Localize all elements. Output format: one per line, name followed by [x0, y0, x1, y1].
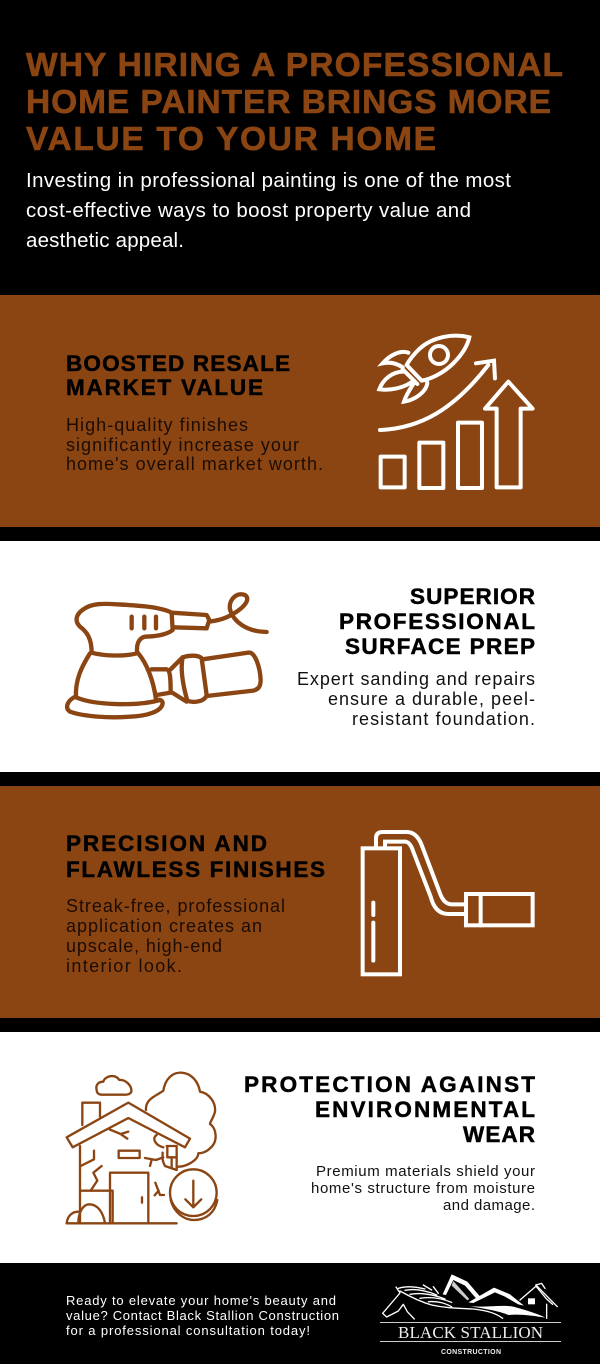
panel: precision and flawless finishes	[0, 786, 600, 1018]
logo rule: top	[380, 1322, 561, 1323]
intro text: aesthetic appeal.	[26, 229, 184, 252]
logo rule: bottom	[380, 1341, 561, 1342]
text: surface prep: ensure a durable, peel-	[328, 689, 535, 709]
text: surface prep: resistant foundation.	[352, 709, 535, 729]
heading: boosted resale: MARKET VALUE	[66, 375, 263, 400]
heading: protection: ENVIRONMENTAL	[315, 1097, 535, 1122]
title	[26, 47, 563, 158]
logo name: BLACK STALLION	[398, 1323, 543, 1342]
text: protection	[311, 1163, 535, 1214]
text: precision: upscale, high-end	[66, 936, 222, 956]
logo artwork: horse, mountains and house	[383, 1274, 557, 1319]
text: surface prep: Expert sanding and repairs	[297, 669, 535, 689]
call to action text: for a professional consultation today!	[66, 1323, 310, 1338]
call to action text: Ready to elevate your home's beauty and	[66, 1293, 336, 1308]
text: precision: interior look.	[66, 956, 182, 976]
logo house	[520, 1283, 557, 1318]
text: surface prep	[297, 669, 535, 729]
icon: damaged house	[67, 1073, 217, 1223]
intro text	[26, 169, 511, 252]
title: VALUE TO YOUR HOME	[26, 121, 436, 158]
logo mountains	[443, 1274, 524, 1306]
panel: protection against environmental wear	[0, 1032, 600, 1263]
heading: boosted resale: BOOSTED RESALE	[66, 351, 290, 376]
heading: surface prep: SUPERIOR	[410, 584, 535, 609]
icon: rocket and growth chart	[379, 336, 533, 488]
intro text: cost-effective ways to boost property value and	[26, 199, 471, 222]
header	[26, 47, 563, 252]
heading: precision: PRECISION AND	[66, 831, 267, 856]
heading: protection	[244, 1072, 535, 1147]
heading: surface prep: PROFESSIONAL	[339, 609, 535, 634]
logo window	[528, 1298, 535, 1304]
heading: protection: PROTECTION AGAINST	[244, 1072, 535, 1097]
call to action text	[66, 1293, 339, 1338]
heading: protection: WEAR	[463, 1122, 535, 1147]
logo swoosh	[466, 1306, 545, 1318]
text: boosted resale: High-quality finishes	[66, 415, 248, 435]
text: boosted resale	[66, 415, 323, 474]
text: precision: application creates an	[66, 916, 262, 936]
text: precision	[66, 896, 285, 976]
text: boosted resale: home's overall market worth.	[66, 454, 323, 474]
text: protection: Premium materials shield your	[316, 1163, 535, 1180]
heading: boosted resale	[66, 351, 290, 400]
heading: precision	[66, 831, 325, 882]
text: protection: and damage.	[443, 1197, 535, 1214]
heading: precision: FLAWLESS FINISHES	[66, 857, 325, 882]
heading: surface prep	[339, 584, 535, 659]
panel: boosted resale market value	[0, 295, 600, 527]
footer	[66, 1274, 561, 1356]
panel: superior professional surface prep	[0, 541, 600, 772]
logo: black stallion construction	[380, 1274, 561, 1356]
call to action text: value? Contact Black Stallion Construction	[66, 1308, 339, 1323]
text: precision: Streak-free, professional	[66, 896, 285, 916]
title: WHY HIRING A PROFESSIONAL	[26, 47, 563, 84]
intro text: Investing in professional painting is one of the most	[26, 169, 511, 192]
heading: surface prep: SURFACE PREP	[345, 634, 535, 659]
icon: paint roller	[363, 832, 533, 974]
title: HOME PAINTER BRINGS MORE	[26, 84, 551, 121]
text: boosted resale: significantly increase your	[66, 435, 299, 455]
text: protection: home's structure from moisture	[311, 1180, 535, 1197]
logo horse and mane	[383, 1285, 503, 1319]
icon: orbital sander	[67, 594, 267, 717]
logo tagline: CONSTRUCTION	[441, 1349, 501, 1356]
